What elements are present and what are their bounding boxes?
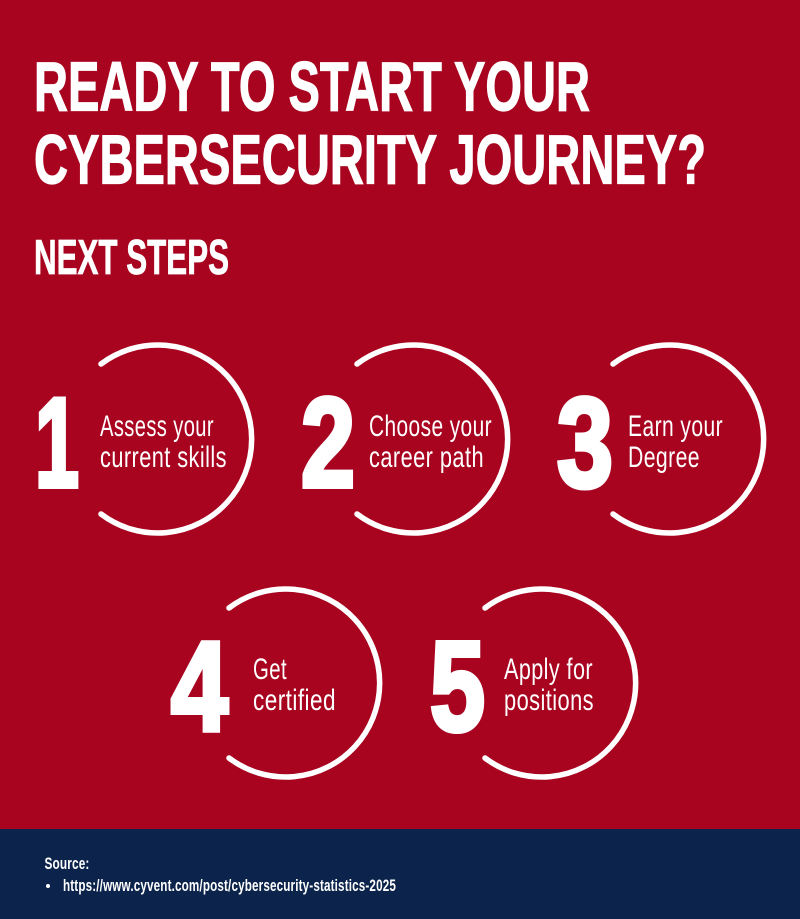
title (34, 48, 706, 198)
label 3 (628, 410, 723, 474)
label 2: Choose your (369, 410, 492, 443)
step 1 (35, 345, 252, 533)
label 5 (504, 653, 594, 717)
arc 5 (485, 589, 636, 777)
arc 4 (229, 589, 380, 777)
label 5: Apply for (504, 653, 593, 686)
label 3: Earn your (628, 410, 723, 443)
heading: next steps: NEXT STEPS (34, 231, 229, 285)
arc 2 (357, 345, 508, 533)
label 2: career path (369, 441, 484, 474)
label 4: Get (253, 653, 287, 686)
label 4 (253, 653, 336, 717)
footer band (0, 829, 800, 919)
label 1: Assess your (100, 410, 214, 443)
label 2 (369, 410, 492, 474)
label 3: Degree (628, 441, 700, 474)
label 5: positions (504, 684, 594, 717)
source link: https://www.cyvent.com/post/cybersecurity-statistics-2025 (63, 877, 396, 895)
number 5: 5 (430, 616, 485, 758)
source link (46, 877, 396, 895)
step 5 (430, 589, 636, 777)
step 3 (557, 345, 764, 533)
number 4: 4 (171, 616, 228, 758)
number 3: 3 (557, 372, 613, 514)
source heading: Source: (44, 855, 90, 873)
step 2 (301, 345, 508, 533)
label 4: certified (253, 684, 336, 717)
number 2: 2 (301, 372, 355, 514)
number 1: 1 (35, 372, 79, 514)
label 1: current skills (100, 441, 227, 474)
label 1 (100, 410, 227, 474)
arc 3 (613, 345, 764, 533)
arc 1 (101, 345, 252, 533)
step 4 (171, 589, 380, 777)
